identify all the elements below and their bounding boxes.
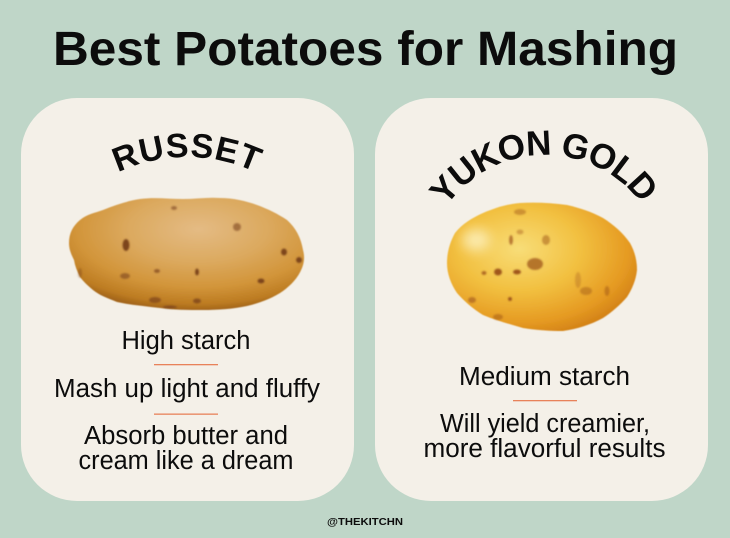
divider [154,364,218,365]
icon: russet potato [69,198,304,310]
divider [154,414,218,415]
text: absorb butter [78,422,294,475]
footer handle: @THEKITCHN [327,516,403,528]
panel: yukon gold [375,98,708,501]
text: will yield: more flavorful results [424,435,666,463]
text: absorb butter: cream like a dream [78,447,294,475]
divider [513,400,577,401]
text: will yield: Will yield creamier, [440,410,650,438]
text: absorb butter: Absorb butter and [84,422,288,450]
title: Best Potatoes for Mashing [53,23,678,76]
text: will yield [424,410,666,463]
heading: russet: RUSSET [112,134,264,172]
text: mash up: Mash up light and fluffy [54,375,320,403]
text: medium starch: Medium starch [459,363,630,391]
heading: yukon gold: YUKON GOLD [428,130,655,200]
panel: russet [21,98,354,501]
icon: yukon potato [447,203,637,331]
text: high starch: High starch [122,327,250,355]
